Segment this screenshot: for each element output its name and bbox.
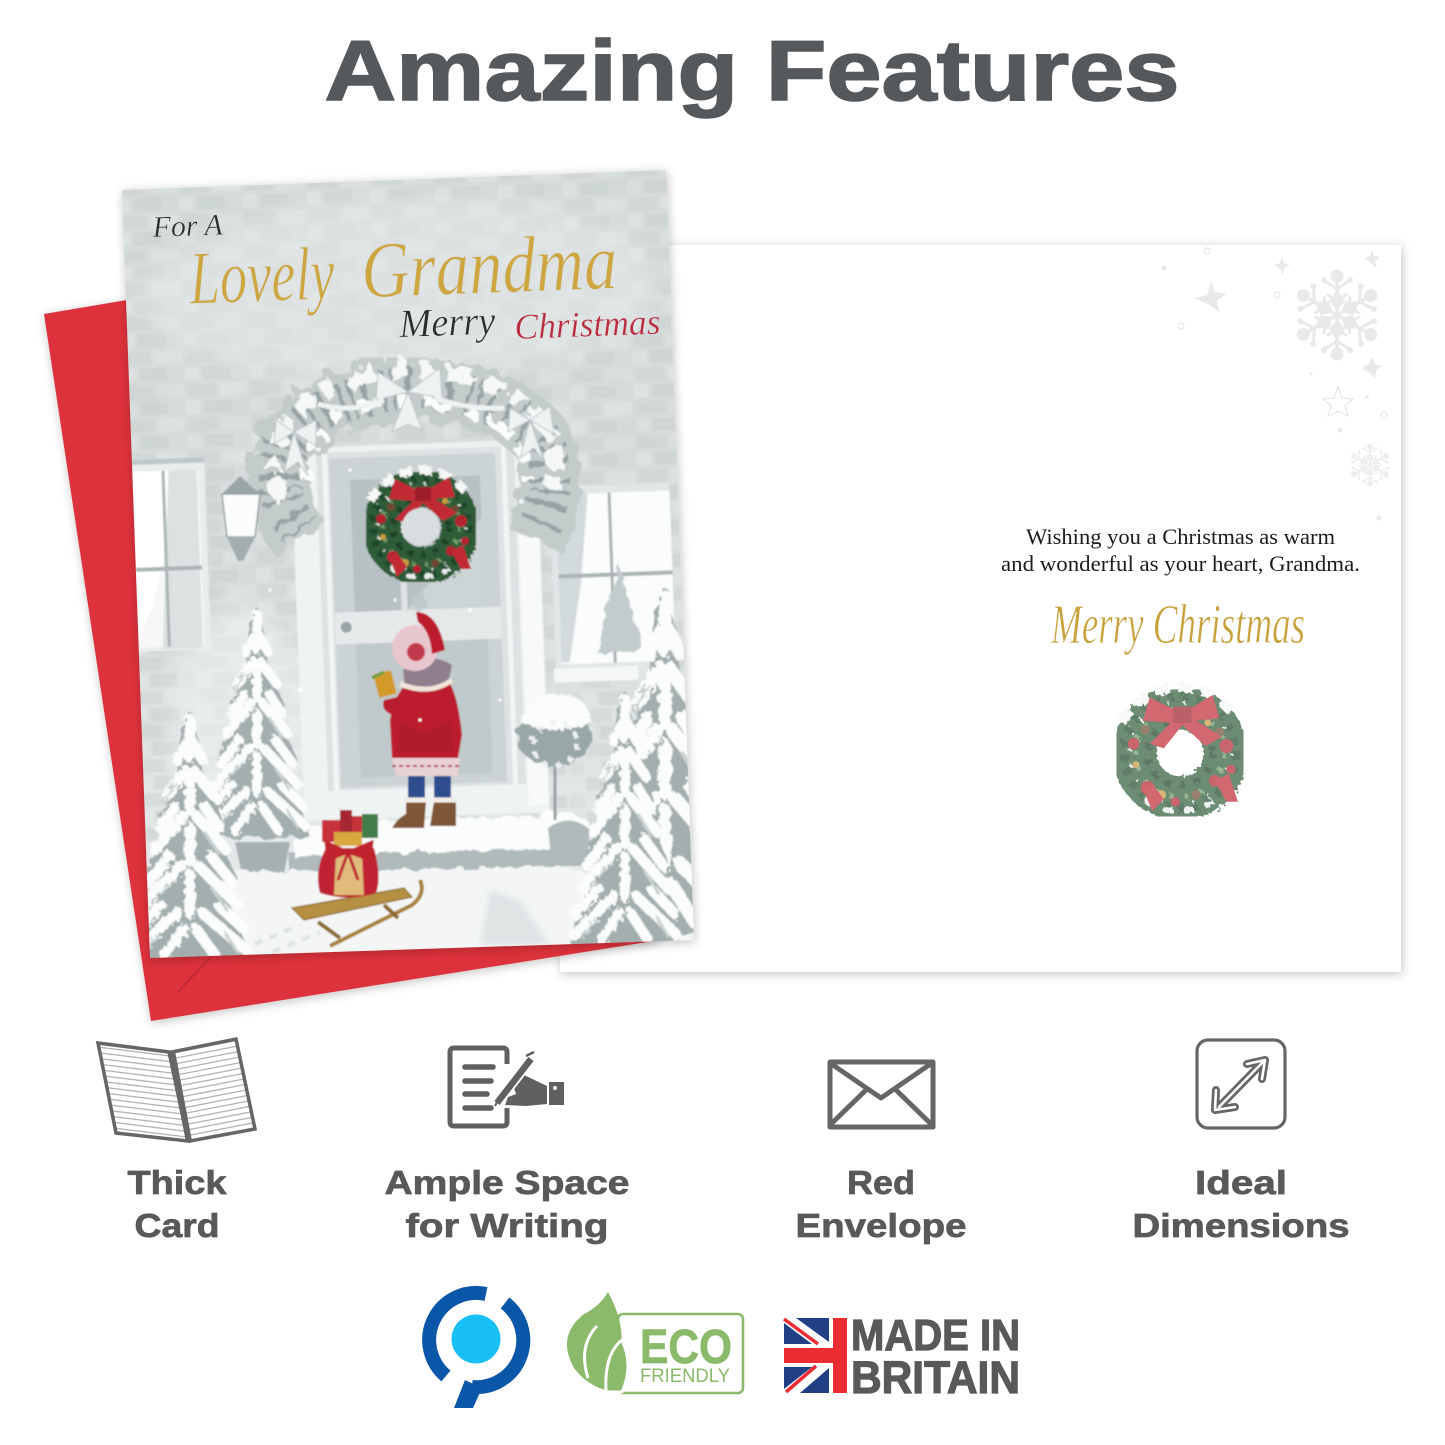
doorstep	[287, 812, 593, 877]
label: Red	[847, 1164, 915, 1201]
gift	[373, 670, 397, 698]
icon: open ruled card	[98, 1039, 255, 1142]
inside gold greeting: Merry Christmas	[1050, 594, 1305, 656]
logo: made in britain: MADE IN	[851, 1311, 1020, 1360]
label	[796, 1164, 966, 1244]
building wall and door, rotated with the card	[118, 167, 694, 936]
sledge	[292, 880, 422, 946]
feature: red envelope	[796, 1062, 966, 1244]
greeting text: Grandma	[360, 218, 619, 315]
logo: eco friendly: ECO	[640, 1321, 732, 1374]
legs	[408, 776, 425, 802]
panel: card front	[106, 160, 740, 970]
red envelope	[44, 300, 660, 1021]
left window	[128, 457, 211, 652]
logo: blue ring mark	[429, 1293, 523, 1408]
label	[1132, 1164, 1350, 1244]
label: for Writing	[406, 1207, 608, 1244]
greeting text: Christmas	[514, 302, 661, 347]
icon: union flag	[784, 1318, 847, 1393]
logo: eco friendly: FRIENDLY	[640, 1366, 730, 1387]
icon: small snowflake	[1348, 444, 1392, 486]
sack of presents	[318, 810, 379, 898]
feature: ideal dimensions	[1132, 1040, 1350, 1244]
inside verse text	[1001, 524, 1360, 576]
logo: made in britain	[784, 1311, 1020, 1403]
icon: envelope	[830, 1062, 933, 1127]
left planter	[235, 842, 290, 874]
inside wreath illustration	[1122, 687, 1238, 811]
boots	[392, 802, 426, 828]
label: Envelope	[796, 1207, 966, 1244]
right fir trees	[570, 587, 694, 944]
label: Thick	[128, 1164, 227, 1201]
greeting text: For A	[151, 208, 224, 244]
inside verse text: and wonderful as your heart, Grandma.	[1001, 551, 1360, 576]
decorative stars and dots	[1162, 248, 1387, 520]
right window	[547, 482, 676, 683]
title: Amazing Features	[324, 24, 1180, 119]
feature: thick card	[98, 1039, 255, 1244]
label: Card	[134, 1207, 220, 1244]
icon: resize arrow in rounded square	[1197, 1040, 1285, 1128]
lower left fir tree	[146, 712, 249, 958]
left fir tree	[203, 606, 311, 838]
garland over the door	[272, 368, 557, 540]
ribbon bows	[274, 368, 554, 476]
panel: card inside page	[560, 245, 1401, 972]
snowy ground	[223, 864, 691, 954]
feature: ample space for writing	[384, 1048, 630, 1244]
door wreath	[371, 470, 471, 577]
wall lantern	[222, 476, 260, 561]
icon: hand writing on document	[450, 1048, 564, 1126]
greeting text: Merry	[397, 298, 496, 346]
logo: eco friendly	[567, 1292, 743, 1393]
topiary bush	[517, 694, 593, 820]
door surround	[291, 440, 550, 821]
icon: large snowflake	[1290, 270, 1384, 360]
label: Ample Space	[384, 1164, 630, 1201]
label	[128, 1164, 227, 1244]
child in red coat	[372, 592, 462, 828]
inside verse text: Wishing you a Christmas as warm	[1026, 524, 1335, 549]
label: Ideal	[1195, 1164, 1287, 1201]
label	[384, 1164, 630, 1244]
logo: made in britain: BRITAIN	[851, 1352, 1020, 1403]
right planter	[548, 820, 590, 866]
label: Dimensions	[1132, 1207, 1350, 1244]
door	[314, 440, 528, 791]
greeting text: Lovely	[187, 232, 336, 321]
falling snow	[268, 468, 502, 722]
door knob	[340, 621, 352, 634]
greeting text	[152, 214, 660, 343]
